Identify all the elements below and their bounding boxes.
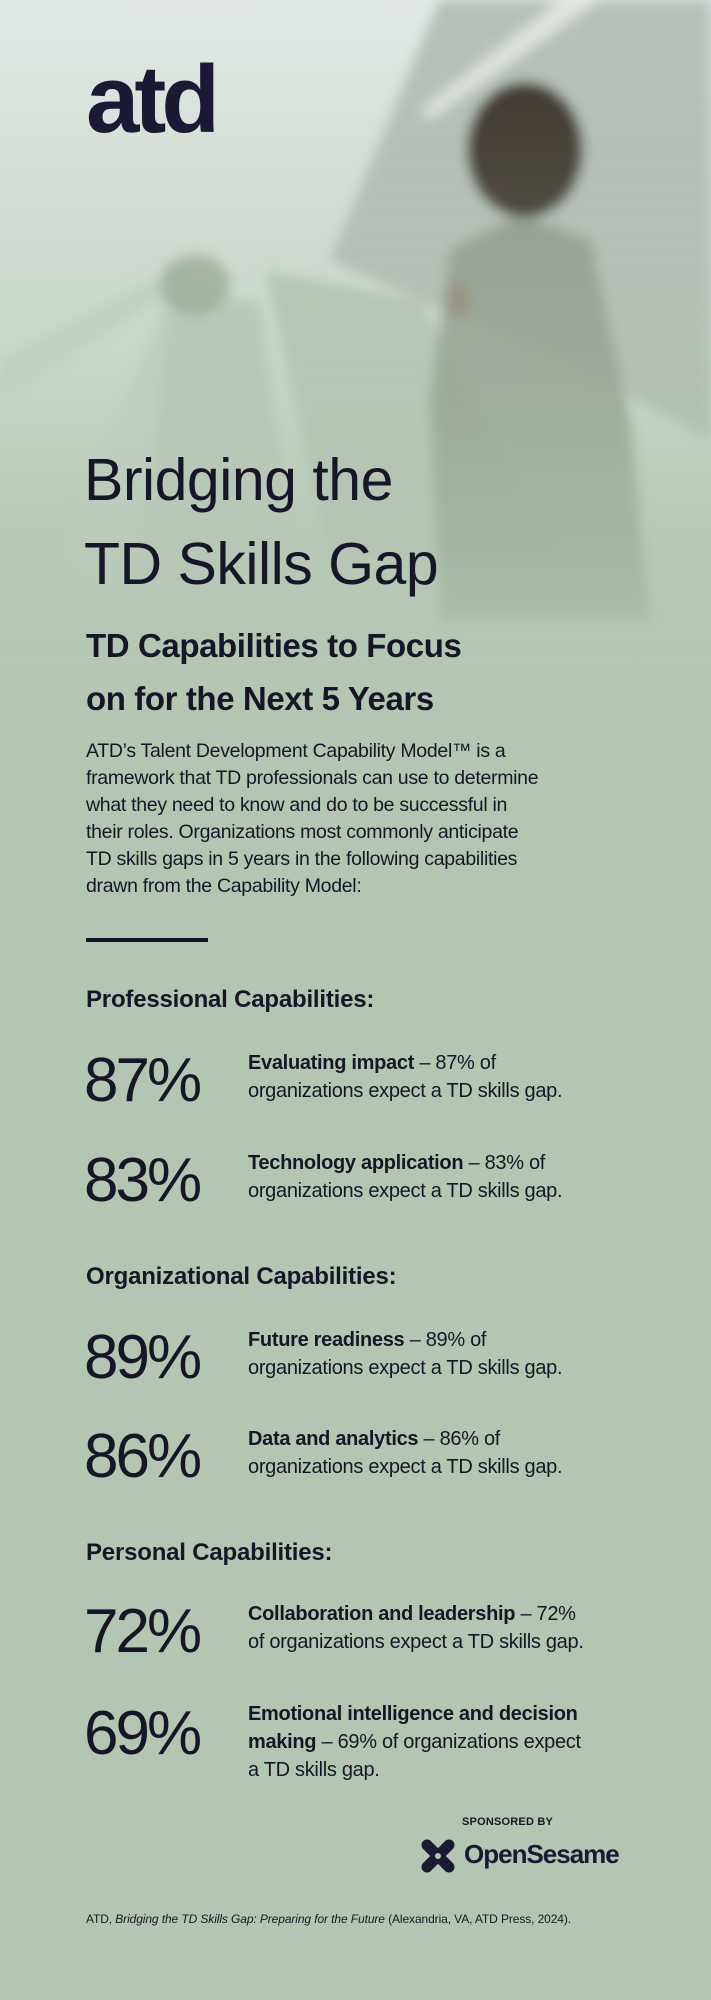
description: organizations expect a TD skills gap. — [248, 1456, 562, 1478]
heading: professional capabilities: Professional Capabilities: — [86, 986, 374, 1013]
sponsored by label: SPONSORED BY — [462, 1816, 553, 1828]
sponsor block — [422, 1816, 619, 1872]
description — [248, 1329, 562, 1379]
percent: 86% — [84, 1422, 199, 1491]
intro paragraph: their roles. Organizations most commonly anticipate — [86, 821, 518, 843]
percent: 87% — [84, 1046, 199, 1115]
intro paragraph: drawn from the Capability Model: — [86, 875, 361, 897]
stat 69% — [84, 1699, 581, 1781]
opensesame wordmark: OpenSesame — [464, 1839, 619, 1869]
description — [248, 1152, 562, 1202]
description: organizations expect a TD skills gap. — [248, 1080, 562, 1102]
description: Technology application – 83% of — [248, 1152, 545, 1174]
logo: atd: atd — [86, 46, 215, 153]
percent: 89% — [84, 1323, 199, 1392]
intro paragraph: what they need to know and do to be successful in — [86, 794, 507, 816]
description — [248, 1603, 584, 1653]
description: Emotional intelligence and decision — [248, 1703, 578, 1725]
intro paragraph: TD skills gaps in 5 years in the following capabilities — [86, 848, 517, 870]
subtitle — [86, 627, 461, 717]
description: making – 69% of organizations expect — [248, 1731, 581, 1753]
description — [248, 1428, 562, 1478]
description: Future readiness – 89% of — [248, 1329, 486, 1351]
citation: ATD, Bridging the TD Skills Gap: Preparing for the Future (Alexandria, VA, ATD Press, 2024). — [86, 1912, 571, 1926]
description: Collaboration and leadership – 72% — [248, 1603, 576, 1625]
subtitle: on for the Next 5 Years — [86, 680, 434, 717]
description: of organizations expect a TD skills gap. — [248, 1631, 584, 1653]
subtitle: TD Capabilities to Focus — [86, 627, 461, 664]
percent: 69% — [84, 1699, 199, 1768]
stat 87% — [84, 1046, 562, 1115]
background photo — [0, 0, 711, 616]
description: organizations expect a TD skills gap. — [248, 1180, 562, 1202]
description: Data and analytics – 86% of — [248, 1428, 500, 1450]
percent: 83% — [84, 1146, 199, 1215]
title — [84, 447, 438, 597]
icon: opensesame logo — [422, 1840, 454, 1872]
description: Evaluating impact – 87% of — [248, 1052, 496, 1074]
description — [248, 1052, 562, 1102]
heading: organizational capabilities: Organizational Capabilities: — [86, 1263, 396, 1290]
percent: 72% — [84, 1597, 199, 1666]
intro paragraph: framework that TD professionals can use to determine — [86, 767, 538, 789]
title: TD Skills Gap — [84, 531, 438, 597]
description — [248, 1703, 581, 1781]
stat 72% — [84, 1597, 584, 1666]
intro paragraph — [86, 740, 538, 897]
stat 89% — [84, 1323, 562, 1392]
description: a TD skills gap. — [248, 1759, 380, 1781]
title: Bridging the — [84, 447, 393, 513]
heading: personal capabilities: Personal Capabilities: — [86, 1539, 332, 1566]
intro paragraph: ATD’s Talent Development Capability Model™ is a — [86, 740, 505, 762]
description: organizations expect a TD skills gap. — [248, 1357, 562, 1379]
stat 83% — [84, 1146, 562, 1215]
stat 86% — [84, 1422, 562, 1491]
